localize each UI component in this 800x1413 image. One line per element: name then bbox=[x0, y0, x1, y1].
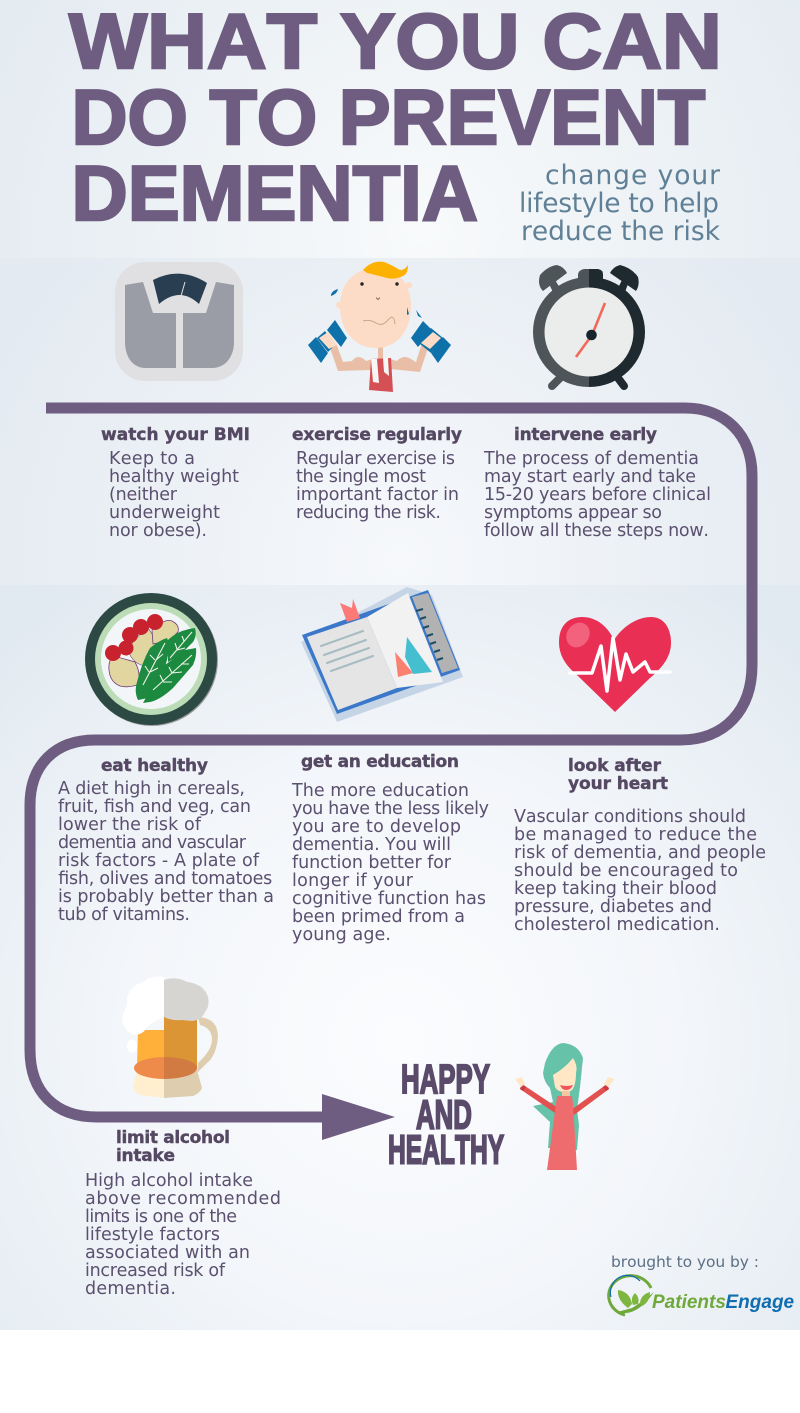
text: look after your heart: look after bbox=[568, 756, 662, 776]
subtitle: change your bbox=[545, 160, 720, 191]
text: look after your heart: risk of dementia, and people bbox=[514, 843, 766, 863]
text: eat healthy: dementia and vascular bbox=[58, 833, 247, 853]
happy and healthy label: AND bbox=[416, 1093, 472, 1138]
text: intervene early: symptoms appear so bbox=[484, 503, 662, 523]
text: eat healthy: is probably better than a bbox=[58, 887, 274, 907]
icon: heart with pulse bbox=[559, 617, 671, 712]
text: exercise regularly: reducing the risk. bbox=[296, 503, 441, 523]
text: look after your heart: should be encouraged to bbox=[514, 861, 738, 881]
icon: plate of healthy food bbox=[85, 593, 218, 726]
icon: weighing scale bbox=[115, 262, 243, 381]
title: DO TO PREVENT bbox=[72, 75, 705, 161]
happy and healthy label: HEALTHY bbox=[388, 1127, 504, 1173]
text: get an education bbox=[291, 752, 489, 945]
logo: PatientsEngage: Patients bbox=[652, 1292, 726, 1313]
text: watch your BMI: underweight bbox=[109, 503, 220, 523]
text: exercise regularly: exercise regularly bbox=[292, 425, 462, 445]
text: limit alcohol intake: intake bbox=[116, 1146, 175, 1166]
header background panel bbox=[0, 0, 800, 258]
text: eat healthy: fruit, fish and veg, can bbox=[58, 797, 251, 817]
text: get an education: young age. bbox=[292, 925, 391, 945]
subtitle: reduce the risk bbox=[521, 216, 721, 247]
text: intervene early: follow all these steps now. bbox=[484, 521, 709, 541]
text: limit alcohol intake: High alcohol intake bbox=[85, 1171, 253, 1191]
text: get an education: cognitive function has bbox=[292, 889, 486, 909]
text: get an education: function better for bbox=[292, 853, 452, 873]
icon: beer mug bbox=[122, 977, 218, 1098]
happy and healthy label: HAPPY bbox=[401, 1057, 490, 1103]
text: intervene early: may start early and take bbox=[484, 467, 696, 487]
happy and healthy label bbox=[388, 1057, 504, 1173]
text: eat healthy bbox=[58, 756, 274, 925]
text: limit alcohol intake: lifestyle factors bbox=[85, 1225, 220, 1245]
text: eat healthy: risk factors - A plate of bbox=[58, 851, 260, 871]
text: limit alcohol intake: limits is one of the bbox=[85, 1207, 237, 1227]
text: look after your heart: pressure, diabetes and bbox=[514, 897, 712, 917]
text: look after your heart: cholesterol medication. bbox=[514, 915, 720, 935]
text: get an education: The more education bbox=[291, 781, 469, 801]
text: exercise regularly: Regular exercise is bbox=[296, 449, 455, 469]
text: look after your heart: be managed to reduce the bbox=[514, 825, 757, 845]
text: get an education: you are to develop bbox=[292, 817, 461, 837]
icon: happy woman with raised arms bbox=[515, 1043, 615, 1170]
text: get an education: longer if your bbox=[292, 871, 414, 891]
logo: PatientsEngage: Engage bbox=[726, 1292, 795, 1313]
icon: open book bbox=[301, 587, 463, 722]
journey path line bbox=[30, 408, 752, 1117]
arrow head bbox=[322, 1094, 395, 1140]
text: exercise regularly bbox=[292, 425, 462, 523]
subtitle: lifestyle to help bbox=[519, 188, 719, 219]
subtitle bbox=[519, 160, 721, 247]
text: eat healthy: A diet high in cereals, bbox=[58, 779, 245, 799]
text: intervene early: 15-20 years before clinical bbox=[484, 485, 711, 505]
text: exercise regularly: important factor in bbox=[296, 485, 459, 505]
title: DEMENTIA bbox=[72, 149, 478, 237]
text: look after your heart: keep taking their blood bbox=[514, 879, 717, 899]
text: watch your BMI: nor obese). bbox=[109, 521, 207, 541]
logo: PatientsEngage bbox=[609, 1275, 795, 1315]
text: limit alcohol intake: increased risk of bbox=[85, 1261, 226, 1281]
icon: man exercising with dumbbells bbox=[308, 262, 451, 392]
text: look after your heart: your heart bbox=[568, 774, 668, 794]
title: WHAT YOU CAN bbox=[69, 0, 722, 85]
upper section panel bbox=[0, 258, 800, 585]
icon: alarm clock bbox=[533, 265, 645, 387]
text: intervene early: The process of dementia bbox=[483, 449, 699, 469]
text: eat healthy: fish, olives and tomatoes bbox=[58, 869, 272, 889]
text: watch your BMI: watch your BMI bbox=[101, 425, 250, 445]
text: look after your heart: Vascular conditions should bbox=[514, 807, 746, 827]
text: get an education: you have the less likely bbox=[292, 799, 489, 819]
text: eat healthy: eat healthy bbox=[101, 756, 208, 776]
text: get an education: dementia. You will bbox=[292, 835, 451, 855]
credit line: brought to you by : bbox=[611, 1253, 759, 1271]
title bbox=[69, 0, 722, 237]
text: get an education: been primed from a bbox=[292, 907, 465, 927]
text: exercise regularly: the single most bbox=[296, 467, 426, 487]
text: limit alcohol intake bbox=[85, 1128, 281, 1299]
text: limit alcohol intake: limit alcohol bbox=[116, 1128, 230, 1148]
text: get an education: get an education bbox=[301, 752, 459, 772]
text: limit alcohol intake: above recommended bbox=[85, 1189, 281, 1209]
text: limit alcohol intake: associated with an bbox=[85, 1243, 250, 1263]
text: look after your heart bbox=[514, 756, 766, 935]
text: watch your BMI: Keep to a bbox=[109, 449, 195, 469]
text: watch your BMI: healthy weight bbox=[109, 467, 239, 487]
text: watch your BMI bbox=[101, 425, 250, 541]
text: intervene early: intervene early bbox=[514, 425, 657, 445]
text: intervene early bbox=[483, 425, 711, 541]
text: eat healthy: lower the risk of bbox=[58, 815, 202, 835]
text: limit alcohol intake: dementia. bbox=[85, 1279, 176, 1299]
lower section panel bbox=[0, 585, 800, 1330]
text: eat healthy: tub of vitamins. bbox=[58, 905, 190, 925]
text: watch your BMI: (neither bbox=[109, 485, 178, 505]
